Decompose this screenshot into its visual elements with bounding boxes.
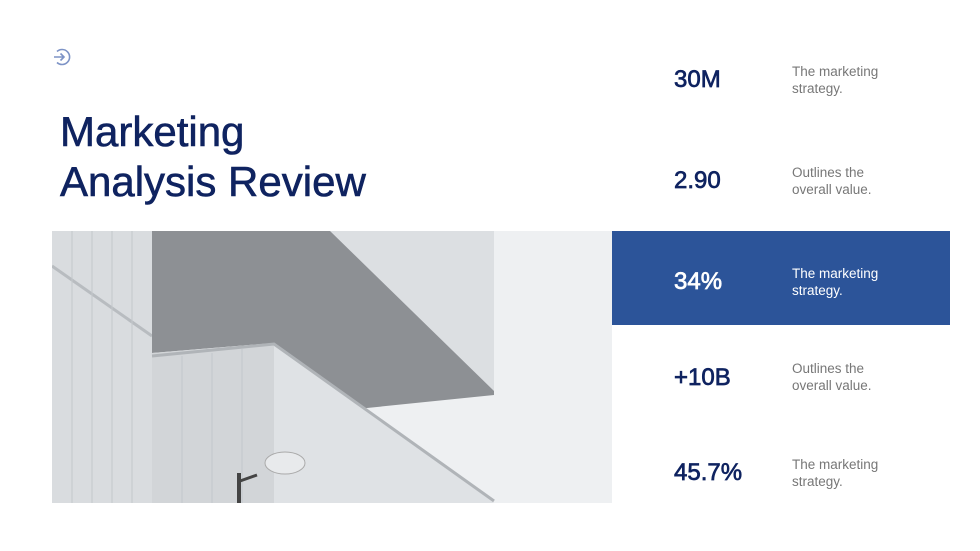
highlight band <box>612 231 950 325</box>
text: overall value. <box>792 378 872 393</box>
text: strategy. <box>792 283 843 298</box>
stat 2 <box>674 165 872 197</box>
text: The marketing <box>792 64 878 79</box>
text: 34% <box>674 268 722 295</box>
photo: building <box>52 231 612 503</box>
stat 4 <box>674 361 872 393</box>
text: 30M <box>674 66 721 93</box>
text: +10B <box>674 364 731 391</box>
text: strategy. <box>792 81 843 96</box>
text: 45.7% <box>674 459 742 486</box>
text: strategy. <box>792 474 843 489</box>
text: Outlines the <box>792 165 864 180</box>
text: overall value. <box>792 182 872 197</box>
text: The marketing <box>792 457 878 472</box>
text: The marketing <box>792 266 878 281</box>
title: Analysis Review <box>60 158 366 205</box>
stat 5 <box>674 457 878 489</box>
stat 1 <box>674 64 878 96</box>
text: Outlines the <box>792 361 864 376</box>
stat 3 <box>674 266 878 298</box>
icon: enter arrow <box>54 48 70 66</box>
text: 2.90 <box>674 167 721 194</box>
title: Marketing <box>60 108 244 155</box>
title <box>60 108 366 205</box>
